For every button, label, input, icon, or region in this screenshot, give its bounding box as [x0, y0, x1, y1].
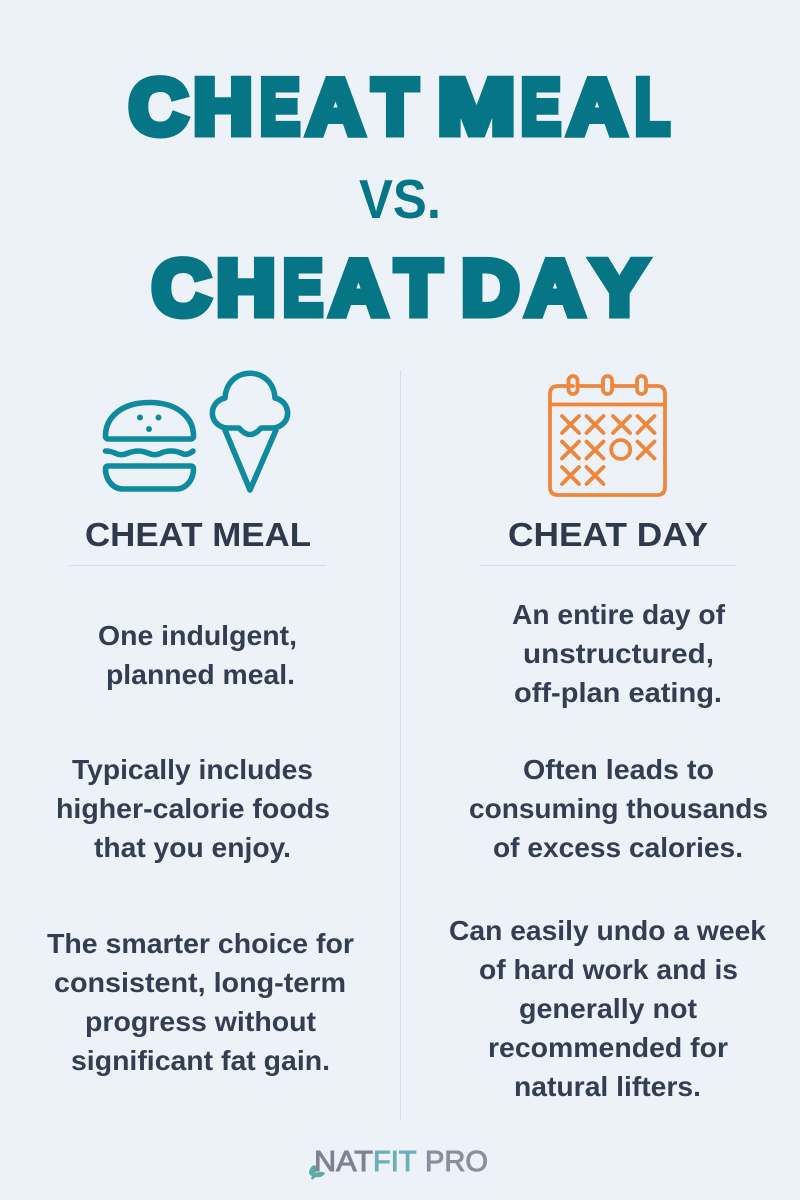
panel: cheat day [449, 376, 768, 1102]
title: H [193, 64, 252, 150]
title: L [635, 64, 670, 150]
icon: burger [106, 402, 194, 489]
text: one indulgent meal: One indulgent, [98, 620, 297, 651]
text: an entire day: An entire day of [512, 599, 726, 630]
text: the smarter choice: significant fat gain. [71, 1045, 330, 1076]
title: Y [592, 246, 647, 332]
text: an entire day: off-plan eating. [514, 677, 722, 708]
text: the smarter choice [47, 928, 354, 1076]
icon: leaf [309, 1165, 325, 1180]
text: higher-calorie foods: that you enjoy. [94, 832, 291, 863]
logo: natfit pro [309, 1146, 488, 1180]
text: thousands of excess calories: of excess calories. [493, 832, 743, 863]
text: the smarter choice: consistent, long-term [54, 967, 346, 998]
text: thousands of excess calories: Often leads to [523, 754, 714, 785]
title: C [129, 64, 188, 150]
text: an entire day: unstructured, [523, 638, 714, 669]
text: one indulgent meal: planned meal. [106, 659, 295, 690]
title: E [521, 64, 561, 150]
title: A [307, 64, 364, 150]
title: VS. [359, 168, 441, 230]
text: the smarter choice: progress without [85, 1006, 316, 1037]
title: C [152, 246, 210, 332]
title: A [568, 64, 626, 150]
title: M [438, 64, 515, 150]
text: undo a week of hard work: of hard work and is [479, 954, 738, 985]
text: undo a week of hard work: Can easily undo a week [449, 915, 766, 946]
text: undo a week of hard work [449, 915, 766, 1102]
text: undo a week of hard work: recommended for [488, 1032, 728, 1063]
title [129, 64, 670, 332]
title: T [373, 64, 417, 150]
icon: ice cream cone [212, 373, 288, 490]
text: higher-calorie foods [56, 754, 330, 863]
text: higher-calorie foods: higher-calorie foods [56, 793, 330, 824]
title: D [462, 246, 519, 332]
text: thousands of excess calories [469, 754, 768, 863]
text: undo a week of hard work: natural lifters. [514, 1071, 701, 1102]
title: E [260, 64, 300, 150]
icon: calendar [550, 376, 665, 495]
logo: natfit pro: FIT [373, 1146, 417, 1178]
heading: cheat day: CHEAT DAY [508, 516, 708, 553]
title: A [330, 246, 387, 332]
panel: cheat meal [47, 373, 354, 1076]
heading: cheat meal: CHEAT MEAL [85, 516, 311, 553]
text: an entire day [512, 599, 726, 708]
title: E [283, 246, 323, 332]
logo: natfit pro: PRO [425, 1146, 488, 1178]
logo: natfit pro: NAT [314, 1146, 373, 1178]
title: A [526, 246, 584, 332]
text: the smarter choice: The smarter choice for [47, 928, 354, 959]
text: thousands of excess calories: consuming thousands [469, 793, 768, 824]
title: T [396, 246, 441, 332]
text: undo a week of hard work: generally not [519, 993, 697, 1024]
text: higher-calorie foods: Typically includes [72, 754, 313, 785]
text: one indulgent meal [98, 620, 297, 690]
title: H [216, 246, 276, 332]
